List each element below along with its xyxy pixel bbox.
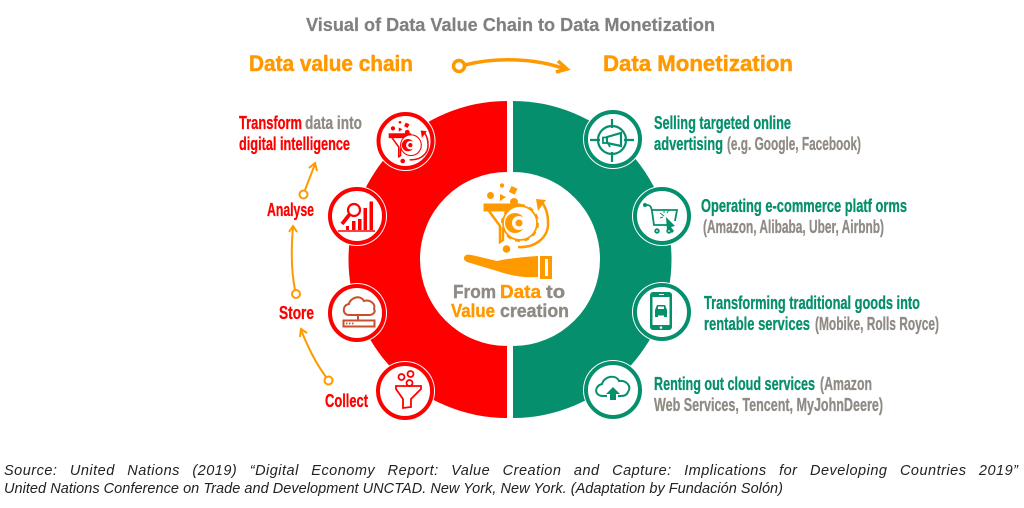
- text: value creation: [451, 301, 569, 321]
- title: Visual of Data Value Chain to Data Monetization: [306, 15, 715, 35]
- text: rentable services: (Mobike, Rolls Royce): [815, 314, 939, 334]
- icon: transform: [376, 111, 436, 171]
- arrow: value chain to monetization: [454, 60, 567, 72]
- text: rentable services: [704, 293, 939, 334]
- source note: Source: United Nations (2019) “Digital Economy Report: Value Creation and Capture: Implications for Developing Countries 2019”: [4, 463, 1019, 479]
- text: collect: Collect: [325, 391, 368, 411]
- icon: phone with taxi: [632, 282, 692, 342]
- text: selling advertising: Selling targeted online: [654, 113, 791, 133]
- icon: central funnel and hand: [464, 183, 552, 279]
- arrow: store to analyse: [289, 226, 300, 298]
- text: store: Store: [279, 303, 314, 323]
- text: cloud services: Web Services, Tencent, MyJohnDeere): [654, 395, 883, 415]
- text: transform step: [239, 113, 362, 154]
- panel: green half ring: [513, 101, 672, 418]
- icon: collect: [375, 361, 435, 421]
- text: from data to: Data: [500, 282, 542, 302]
- text: selling advertising: advertising: [654, 134, 723, 154]
- text: from data to: to: [546, 282, 565, 302]
- source note: [4, 463, 1019, 497]
- icon: analyse: [327, 186, 387, 246]
- text: transform step: digital intelligence: [239, 134, 350, 154]
- text: cloud services: [654, 374, 883, 415]
- text: e-commerce platforms: [701, 196, 907, 237]
- text: e-commerce platforms: (Amazon, Alibaba, Uber, Airbnb): [703, 217, 884, 237]
- icon: shopping cart: [632, 186, 692, 246]
- text: rentable services: Transforming traditional goods into: [704, 293, 920, 313]
- text: selling advertising: (e.g. Google, Facebook): [727, 134, 861, 154]
- text: transform step: Transform: [239, 113, 302, 133]
- text: e-commerce platforms: Operating e-commerce platf orms: [701, 196, 907, 216]
- icon: targeted advertising: [583, 109, 643, 169]
- text: from data to: From: [453, 282, 496, 302]
- text: selling advertising: [654, 113, 861, 154]
- text: transform step: data into: [305, 113, 362, 133]
- panel: red half ring: [349, 101, 507, 418]
- heading: data value chain: Data value chain: [249, 51, 413, 76]
- source note: United Nations Conference on Trade and Development UNCTAD. New York, New York. (Adaptation by Fundación Solón): [4, 481, 783, 497]
- text: analyse: Analyse: [267, 200, 314, 220]
- arrow: collect to store: [300, 329, 332, 384]
- text: value creation: creation: [500, 301, 569, 321]
- arrow: analyse to transform: [300, 163, 317, 198]
- text: value creation: Value: [451, 301, 495, 321]
- text: rentable services: rentable services: [704, 314, 810, 334]
- heading: data monetization: Data Monetization: [603, 51, 793, 76]
- icon: cloud upload: [583, 360, 643, 420]
- text: cloud services: Renting out cloud services: [654, 374, 815, 394]
- text: cloud services: (Amazon: [820, 374, 872, 394]
- text: from data to: [453, 282, 565, 302]
- icon: store: [327, 283, 387, 343]
